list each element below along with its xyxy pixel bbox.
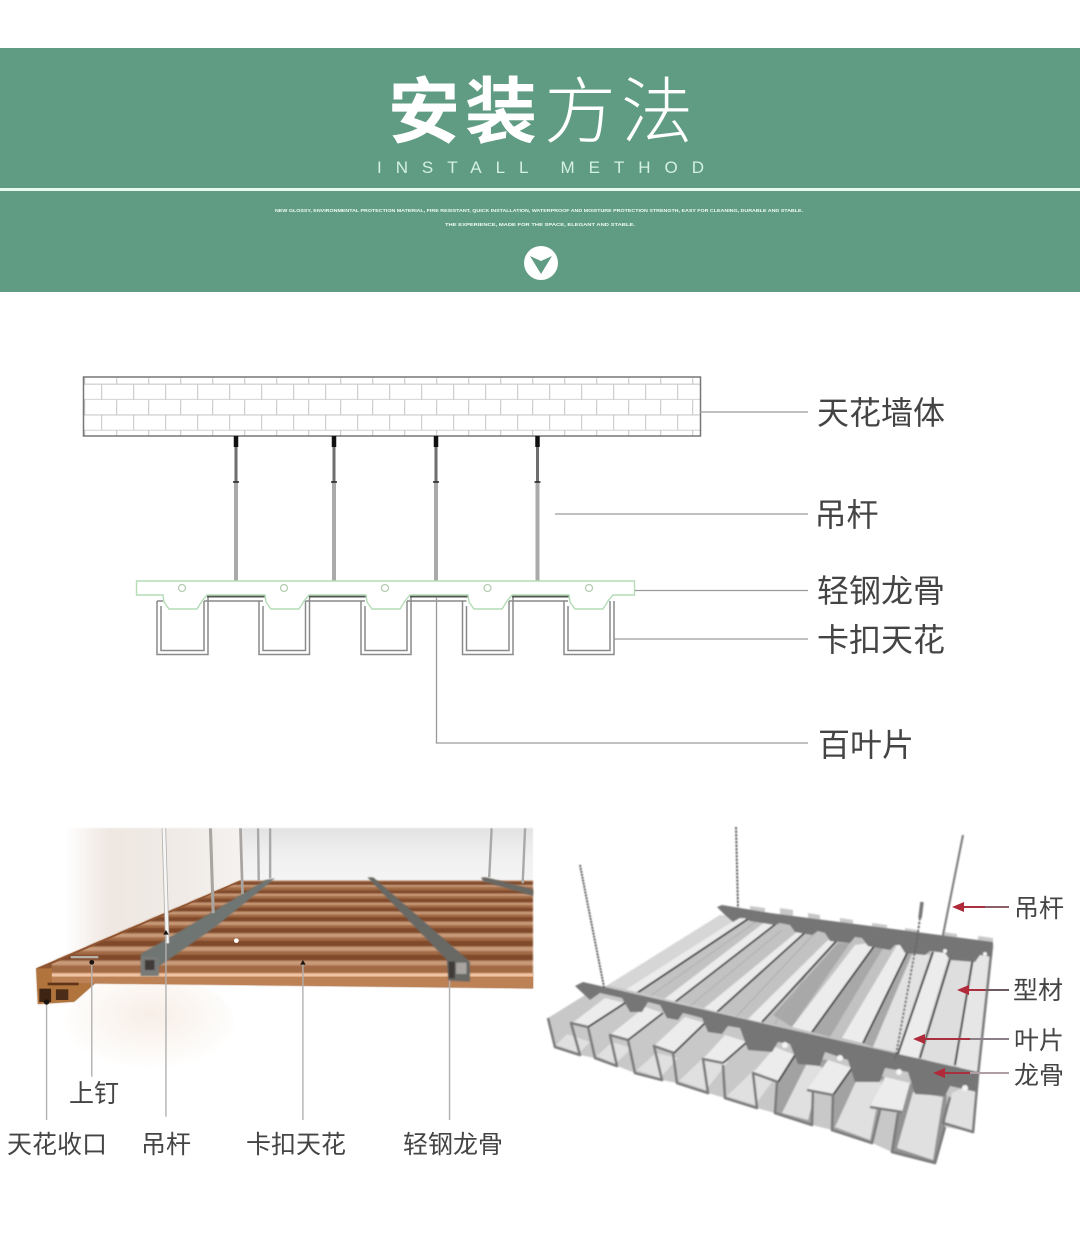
louver assembly: [548, 827, 993, 1163]
rear section shading: [773, 942, 912, 1047]
keel beams: [141, 877, 533, 982]
label: hanger rod: 吊杆: [1014, 895, 1064, 923]
label: nail: 上钉: [69, 1080, 119, 1108]
light steel keel: [136, 581, 634, 609]
ceiling wall: [84, 377, 700, 436]
red arrows: [913, 902, 1009, 1078]
title: 方: [544, 73, 616, 153]
label: blade: 叶片: [1014, 1027, 1064, 1055]
label: hanger rod: 吊杆: [814, 497, 879, 533]
title: 法: [621, 73, 693, 153]
rear section streaks: [650, 922, 828, 1024]
subtitle: INSTALL METHOD: [377, 158, 704, 177]
label: snap ceiling: 卡扣天花: [246, 1131, 346, 1159]
label: profile: 型材: [1013, 977, 1063, 1005]
label: ceiling edge trim: 天花收口: [7, 1131, 107, 1159]
icon: down arrow: [524, 246, 558, 280]
header banner: [0, 48, 1080, 292]
hanger rods: [233, 436, 540, 581]
photo panel: wood ceiling: [0, 828, 552, 1159]
rods: [580, 827, 963, 1060]
section diagram: [84, 377, 945, 763]
louver channels: [157, 596, 614, 654]
channel front outlines: [548, 945, 992, 1163]
back keel: [717, 905, 993, 962]
back tabs: [750, 906, 993, 946]
ceiling render: [0, 828, 552, 1120]
label: light steel keel: 轻钢龙骨: [403, 1131, 503, 1159]
title: 装: [465, 73, 537, 153]
small description text: NEW GLOSSY, ENVIRONMENTAL PROTECTION MATERIAL, FIRE RESISTANT, QUICK INSTALLATION, WATERPROOF AND MOISTURE PROTECTION STRENGTH, EASY FOR CLEANING, DURABLE AND STABLE.: [275, 208, 803, 213]
label: ceiling wall: 天花墙体: [817, 395, 945, 431]
exploded louver drawing: [548, 827, 1064, 1163]
front flanges: [571, 998, 910, 1112]
rear black gaps: [637, 919, 973, 1065]
front base: [548, 985, 978, 1163]
label: louver: 百叶片: [818, 727, 914, 763]
front channel floors: [556, 1034, 978, 1160]
title: [388, 73, 693, 153]
title: 安: [388, 73, 460, 153]
label: hanger rod: 吊杆: [141, 1131, 191, 1159]
rear flange strips: [625, 918, 992, 1075]
front keel: [575, 982, 978, 1096]
label: light steel keel: 轻钢龙骨: [817, 573, 945, 609]
front black gaps: [588, 1003, 852, 1095]
leader lines: [436, 412, 808, 743]
rear section base: [608, 915, 993, 1075]
label: snap ceiling: 卡扣天花: [817, 622, 945, 658]
front channel shaded walls: [775, 1055, 947, 1163]
small description text: THE EXPERIENCE, MADE FOR THE SPACE, ELEGANT AND STABLE.: [445, 222, 635, 227]
small description text: [275, 208, 803, 227]
keel holes: [782, 949, 987, 1091]
label: keel: 龙骨: [1014, 1062, 1064, 1090]
